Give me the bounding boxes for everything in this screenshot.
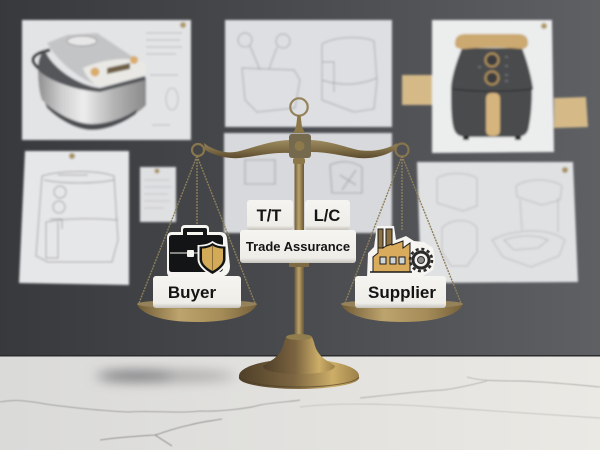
block: Supplier — [355, 276, 446, 308]
icon: briefcase with shield — [167, 225, 230, 277]
sheet: parts sketches — [417, 162, 578, 283]
marble table top — [0, 355, 600, 450]
sheet: small note — [140, 167, 176, 222]
tan note cards — [402, 75, 588, 128]
left chains — [139, 156, 255, 303]
right chains — [345, 156, 461, 303]
sheet: rice cooker photo — [22, 20, 191, 140]
scale beam — [192, 134, 408, 164]
right pan — [341, 300, 463, 322]
rice cooker — [33, 33, 146, 130]
block: Trade Assurance — [240, 230, 356, 263]
block: Buyer — [153, 276, 241, 308]
scale column — [294, 156, 304, 346]
sheet: air fryer sketch — [19, 151, 129, 285]
scale top ring — [290, 98, 308, 133]
block: L/C: L/C — [314, 207, 340, 225]
left pan — [137, 300, 257, 322]
block: T/T: T/T — [257, 207, 281, 225]
shadow of left pan — [95, 371, 235, 381]
sheet: basket sketch — [225, 20, 392, 127]
balance scale — [137, 98, 463, 389]
background: dark wall — [0, 0, 600, 357]
block: Trade Assurance: Trade Assurance — [246, 239, 350, 254]
sheet: component sketch — [224, 133, 392, 233]
air fryer — [451, 34, 533, 140]
icon: factory with gear — [367, 226, 435, 277]
pinned design sheets on the wall — [19, 20, 588, 285]
collar below trade block — [289, 263, 309, 267]
block: T/T — [247, 200, 293, 230]
block: Buyer: Buyer — [168, 283, 216, 302]
block: L/C — [305, 200, 350, 230]
scale base — [239, 334, 359, 389]
block: Supplier: Supplier — [368, 283, 436, 302]
sheet: air fryer photo — [432, 20, 554, 153]
